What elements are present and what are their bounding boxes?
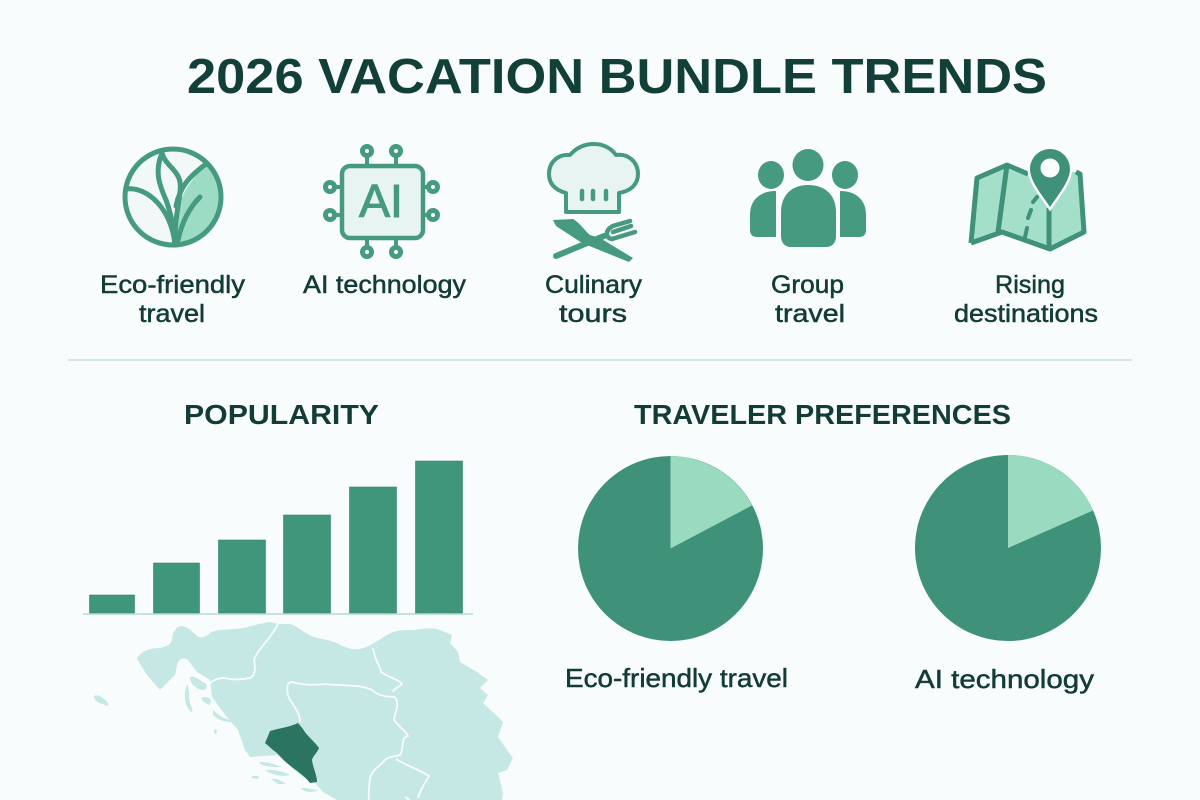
- label: destinations: [954, 300, 1098, 328]
- heading: traveler preferences: TRAVELER PREFERENCES: [634, 399, 1011, 430]
- label: travel: [139, 300, 205, 328]
- panel: popularity: [83, 399, 513, 800]
- label: AI technology: [303, 271, 467, 299]
- trend: rising destinations: [954, 149, 1098, 328]
- label: [100, 271, 246, 328]
- trend: group travel: [750, 149, 866, 328]
- trend: AI technology: [303, 146, 467, 299]
- icon: map with pin: [971, 149, 1084, 249]
- icon: AI chip: AI: [359, 175, 403, 227]
- label: Eco-friendly: [100, 271, 246, 299]
- heading: popularity: POPULARITY: [184, 399, 379, 430]
- icon: chef hat with knife and fork: [549, 144, 638, 262]
- trend: eco-friendly travel: [100, 149, 246, 328]
- label: [954, 271, 1098, 328]
- pie chart: AI technology: [915, 455, 1101, 641]
- icon: leaf in circle: [125, 149, 221, 245]
- icon: AI chip: [326, 146, 438, 256]
- label: travel: [775, 300, 845, 328]
- label: Culinary: [545, 271, 643, 299]
- label: Group: [771, 271, 844, 299]
- label: [545, 271, 643, 328]
- label: tours: [559, 300, 627, 328]
- icon: three people: [750, 149, 866, 247]
- pie chart: eco-friendly travel: [578, 456, 763, 641]
- map: [94, 622, 513, 800]
- label: [771, 271, 845, 328]
- bar chart: [83, 461, 473, 615]
- panel: traveler preferences: [565, 399, 1101, 694]
- pie label: eco-friendly travel: Eco-friendly travel: [565, 663, 788, 693]
- label: Rising: [995, 271, 1065, 299]
- trend: culinary tours: [545, 144, 643, 328]
- title: 2026 VACATION BUNDLE TRENDS: [187, 50, 1047, 104]
- pie label: AI technology: AI technology: [915, 664, 1094, 694]
